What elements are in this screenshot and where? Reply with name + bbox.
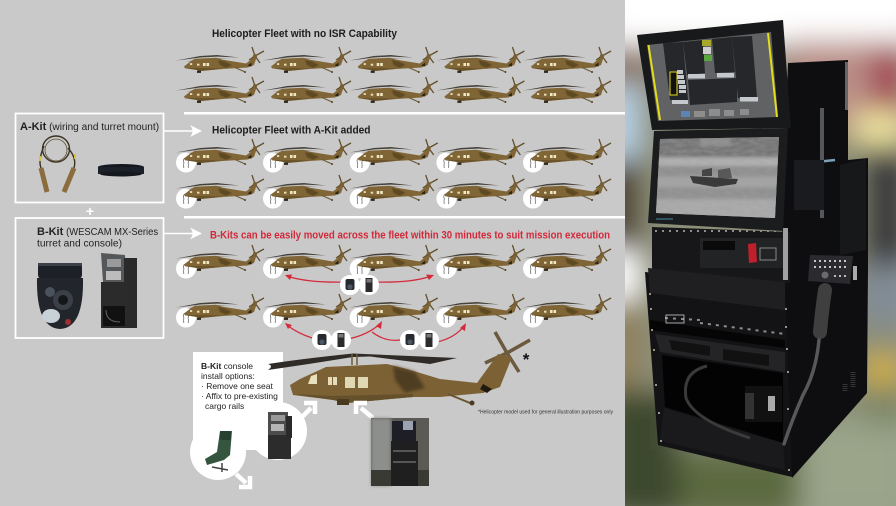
tank in thermal image <box>690 168 738 187</box>
kit transfer icons <box>312 275 439 350</box>
control panel with red switch <box>700 238 785 268</box>
divider line A <box>184 112 625 114</box>
heading: B-Kit mobility: B-Kits can be easily moved across the fleet within 30 minutes to suit mission execution <box>210 230 610 242</box>
footnote: *Helicopter model used for general illustration purposes only <box>478 410 614 416</box>
arrow: console to helicopter <box>302 403 315 417</box>
lower monitor <box>648 128 788 231</box>
panel: A-Kit <box>16 114 164 202</box>
console rack front <box>645 272 792 477</box>
arrow: A-Kit to fleet <box>164 125 202 137</box>
icon: console circle <box>249 402 307 460</box>
photo: console in cabin <box>371 418 429 486</box>
vents <box>845 372 853 392</box>
icon: cable <box>40 136 75 192</box>
icon: turret mount ring <box>98 164 144 176</box>
panel: B-Kit <box>16 218 164 338</box>
blurred background <box>600 0 896 506</box>
callout text: install options: <box>201 371 255 381</box>
icon: console <box>101 253 137 328</box>
red transfer arrows <box>285 274 466 342</box>
asterisk: * <box>523 350 530 369</box>
rivets <box>649 293 790 471</box>
callout text: · Affix to pre-existing <box>201 391 278 401</box>
big helicopter <box>268 332 530 406</box>
upper monitor <box>637 20 791 130</box>
icon: turret <box>37 263 83 329</box>
connector strip <box>665 318 785 334</box>
main rotor <box>268 354 457 370</box>
heading: no ISR fleet: Helicopter Fleet with no ISR Capability <box>212 28 398 40</box>
rear tower <box>780 60 868 478</box>
icon: seat circle <box>190 424 246 480</box>
windows <box>308 374 317 384</box>
panel: photo of console <box>600 0 896 506</box>
helicopter fleet rows: no ISR <box>176 47 611 103</box>
fuselage <box>290 354 512 403</box>
arrow: seat removal <box>236 474 250 487</box>
plus sign: + <box>86 203 94 219</box>
divider line B <box>184 216 625 218</box>
callout text: console <box>221 361 253 371</box>
helicopter fleet rows: A-Kit <box>176 139 611 208</box>
rack opening with cable <box>662 355 783 443</box>
heading: A-Kit fleet: Helicopter Fleet with A-Kit added <box>212 124 370 136</box>
tail rotor <box>485 332 530 372</box>
arrow: cabin photo to helicopter <box>356 403 373 418</box>
keypad <box>808 255 857 284</box>
arrow: B-Kit to fleet <box>164 228 202 240</box>
B-Kit label: B-Kit (WESCAM MX-Series <box>37 226 158 238</box>
panel: B-Kit: turret and console) <box>37 238 122 250</box>
callout text: B-Kit <box>201 361 221 371</box>
left gray background <box>0 0 625 506</box>
A-Kit label: A-Kit (wiring and turret mount) <box>20 121 159 133</box>
callout text: cargo rails <box>205 401 244 411</box>
hand grip and cable <box>784 290 825 444</box>
helicopter fleet rows: B-Kit <box>176 245 611 328</box>
callout text: · Remove one seat <box>201 381 273 391</box>
callout: console install options <box>190 352 307 480</box>
